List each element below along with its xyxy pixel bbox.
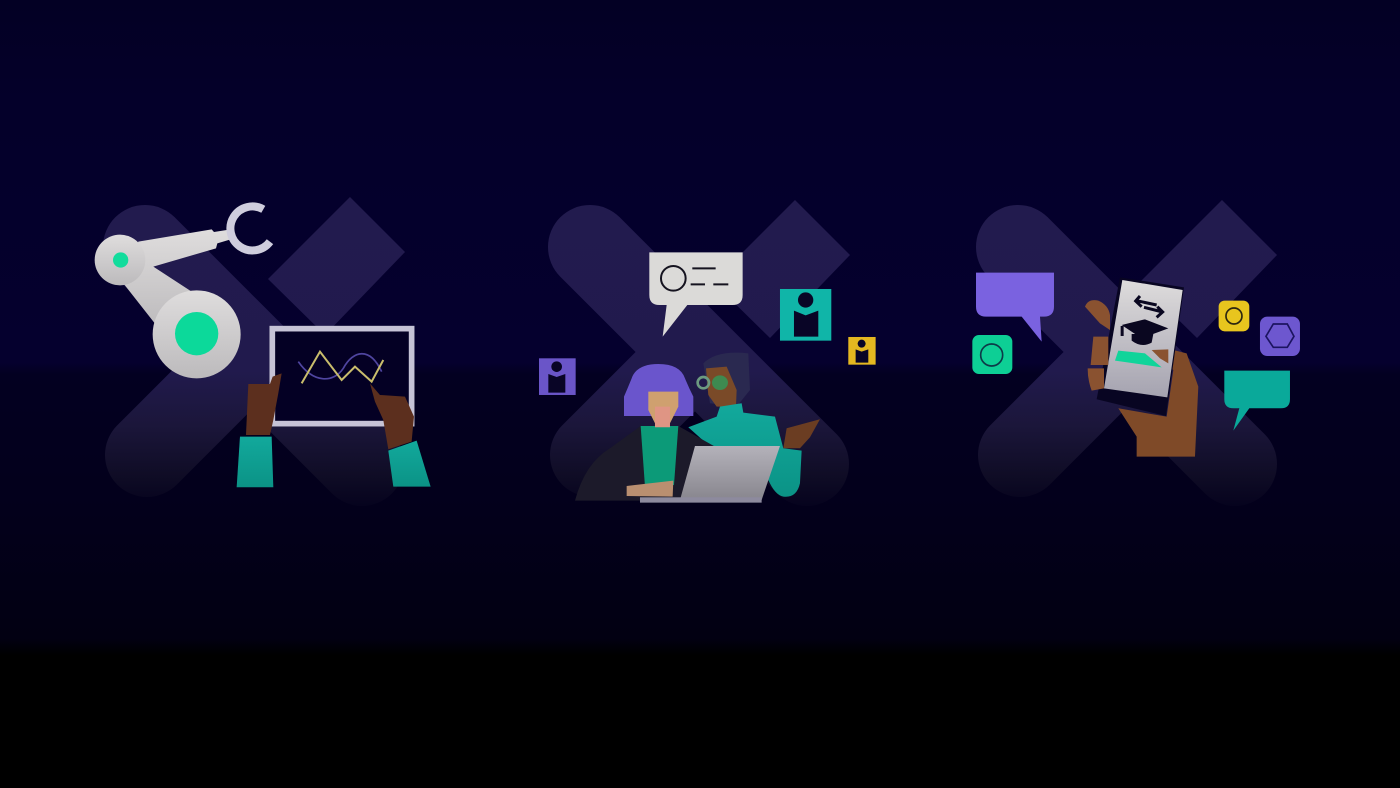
hands and sleeves — [237, 373, 431, 487]
speech bubble: purple — [976, 273, 1054, 342]
x backdrop 1 — [145, 197, 405, 464]
speech bubble — [649, 252, 743, 337]
app icon: purple — [1260, 317, 1300, 356]
profile card: purple — [539, 358, 576, 395]
tablet with line chart — [272, 329, 412, 424]
icon: graduation cap — [1121, 319, 1168, 345]
icon: robot arm — [95, 206, 270, 378]
profile card: teal — [780, 289, 831, 341]
x backdrop 2 — [590, 200, 850, 464]
phone — [1097, 277, 1184, 416]
app icon: yellow — [1219, 301, 1249, 331]
icon: arrows — [1136, 296, 1163, 317]
laptop — [640, 446, 780, 503]
person: woman with purple hair — [575, 364, 715, 501]
fingers — [1085, 300, 1168, 391]
panel: robotics — [95, 197, 431, 487]
panel: mobile learning — [972, 200, 1300, 464]
panel: collaboration — [539, 200, 876, 503]
speech bubble: teal — [1224, 371, 1290, 431]
profile card: yellow — [848, 337, 876, 365]
x backdrop 3 — [1018, 200, 1277, 464]
hand back — [1118, 347, 1198, 457]
app icon: green — [972, 335, 1012, 374]
person: man in teal — [688, 353, 820, 497]
